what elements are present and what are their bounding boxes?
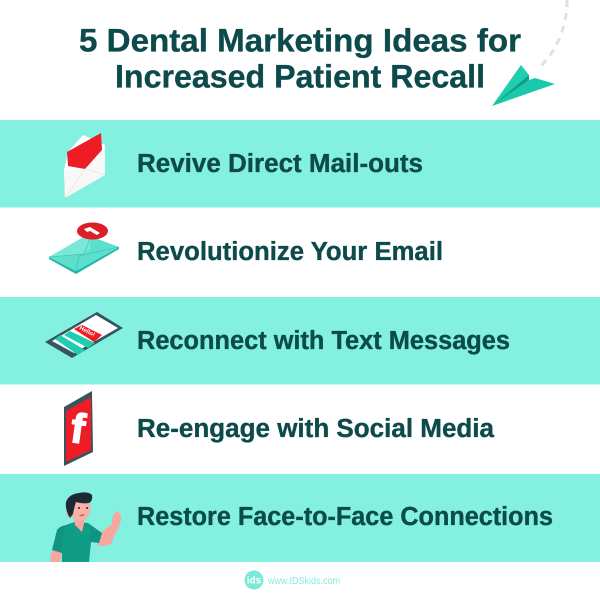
website: www.IDSkids.com xyxy=(267,576,340,587)
icon: email envelope with notification badge xyxy=(49,222,119,274)
panel: social media xyxy=(64,391,495,466)
footer: logo and website xyxy=(244,570,340,590)
title: Increased Patient Recall xyxy=(115,58,485,94)
panel: direct mail-outs xyxy=(0,120,600,208)
icon: upright phone with f logo xyxy=(64,391,93,466)
icon: waving man xyxy=(50,492,121,562)
label: Revive Direct Mail-outs xyxy=(137,150,423,178)
panel: email xyxy=(49,222,443,274)
icon: phone lying flat with message: Hello! xyxy=(78,325,96,339)
title: 5 Dental Marketing Ideas for xyxy=(79,22,521,58)
label: Restore Face-to-Face Connections xyxy=(137,503,553,531)
icon: upright phone with f logo: f xyxy=(68,404,89,453)
icon: phone lying flat with message xyxy=(45,312,123,358)
panel: face-to-face xyxy=(0,474,600,562)
icon: paper plane with dashed trail xyxy=(492,0,567,106)
title xyxy=(79,22,521,94)
panel: text messages xyxy=(0,297,600,384)
label: Reconnect with Text Messages xyxy=(137,327,510,355)
label: Re-engage with Social Media xyxy=(137,415,495,443)
icon: ids logo: ids xyxy=(247,576,262,586)
icon: open envelope with red letter xyxy=(64,133,105,198)
label: Revolutionize Your Email xyxy=(137,238,443,266)
